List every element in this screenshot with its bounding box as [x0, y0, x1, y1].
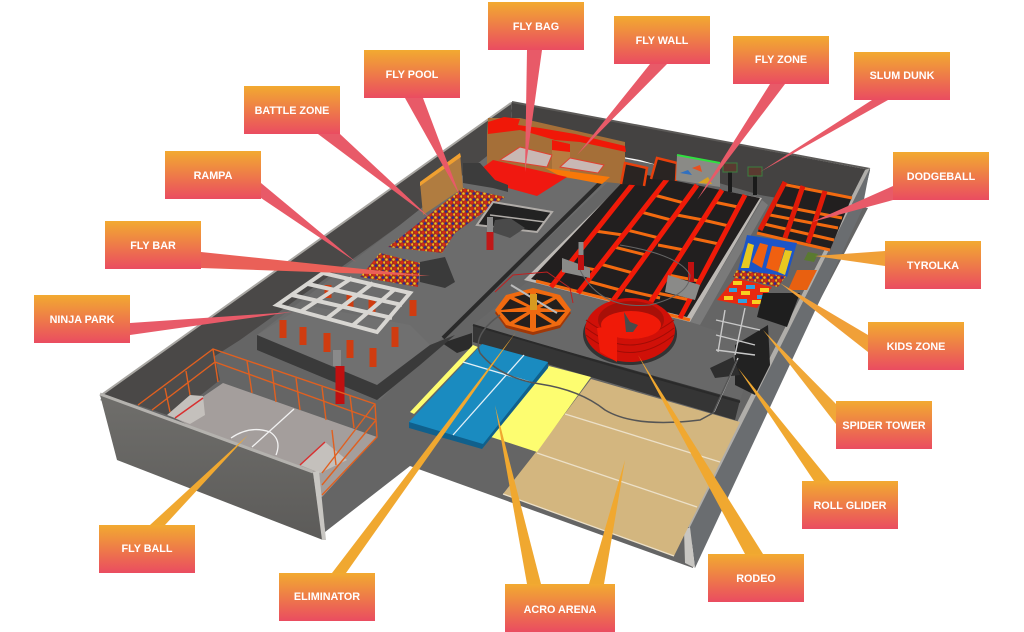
blue mat: [409, 362, 548, 449]
spider tower: [710, 308, 770, 412]
fly ball front wall: [100, 394, 326, 540]
arrow: ninja park: [130, 312, 292, 335]
label: roll glider: [802, 481, 898, 529]
column: battle zone: [486, 217, 494, 250]
upper level floor: [257, 138, 610, 400]
label: acro arena: ACRO ARENA: [524, 604, 597, 616]
label: eliminator: ELIMINATOR: [294, 591, 360, 603]
label: rodeo: RODEO: [736, 573, 776, 585]
column: fly ball: [337, 350, 340, 404]
rodeo: [583, 298, 677, 365]
label: kids zone: [868, 322, 964, 370]
label: fly bag: [488, 2, 584, 50]
goals: [167, 395, 205, 424]
label: slum dunk: SLUM DUNK: [870, 70, 935, 82]
label: slum dunk: [854, 52, 950, 100]
arrow: acro arena left: [495, 405, 541, 584]
label: rampa: [165, 151, 261, 199]
arrow: fly pool: [405, 98, 460, 196]
arrow: slum dunk: [760, 100, 888, 172]
wood back wall: [487, 118, 625, 184]
ball pit: fly pool: [388, 188, 505, 253]
arrow: rampa: [261, 183, 356, 262]
arrow: fly zone: [697, 84, 785, 200]
ninja park platform: [257, 305, 455, 400]
tyrolka pad: [788, 270, 817, 290]
label: battle zone: [244, 86, 340, 134]
building shell: [100, 102, 870, 568]
label: fly zone: FLY ZONE: [755, 54, 807, 66]
kids zone: [717, 235, 818, 327]
label: fly pool: [364, 50, 460, 98]
right wall: [690, 168, 870, 568]
label: rampa: RAMPA: [194, 170, 233, 182]
label: fly zone: [733, 36, 829, 84]
label: tyrolka: TYROLKA: [907, 260, 959, 272]
acro arena: [409, 344, 740, 556]
fly zone trampolines: [524, 172, 762, 322]
arrow: kids zone: [780, 283, 868, 352]
arrow: tyrolka: [815, 251, 885, 266]
label: fly wall: [614, 16, 710, 64]
arrow: acro arena right: [589, 460, 625, 584]
zip cable upper: [580, 245, 690, 306]
label: fly bag: FLY BAG: [513, 21, 559, 33]
tan floor: [503, 379, 740, 556]
orange mat: [545, 168, 610, 184]
back left wall: [100, 102, 512, 405]
arrow: fly ball: [150, 435, 248, 525]
arrow: eliminator: [332, 332, 516, 573]
label: fly wall: FLY WALL: [636, 35, 689, 47]
label: fly bar: [105, 221, 201, 269]
black pits: [477, 202, 552, 238]
court pads: [500, 147, 552, 167]
arrow: spider tower: [763, 330, 836, 424]
arrow: fly bar: [201, 252, 430, 276]
red mat: [482, 160, 567, 196]
ramps: [621, 158, 677, 186]
label: tyrolka: [885, 241, 981, 289]
label: rodeo: [708, 554, 804, 602]
black block: [757, 293, 800, 327]
arrow: fly wall: [577, 64, 667, 155]
label: battle zone: BATTLE ZONE: [255, 105, 329, 117]
back right wall: [510, 102, 870, 212]
fly ball court: [138, 349, 377, 497]
ball pit: fly bar: [360, 253, 420, 287]
label: fly ball: [99, 525, 195, 573]
label: dodgeball: DODGEBALL: [907, 171, 976, 183]
eliminator: [495, 272, 573, 335]
label: fly pool: FLY POOL: [386, 69, 439, 81]
divider: [443, 180, 603, 338]
dodgeball court: [757, 182, 852, 250]
climbing wall: [420, 153, 463, 215]
stairs block: [463, 163, 508, 192]
label: fly bar: FLY BAR: [130, 240, 176, 252]
fly bag area: [463, 117, 626, 196]
slum dunk boards: [723, 163, 762, 195]
kids floor tiles: [717, 278, 772, 308]
label: dodgeball: [893, 152, 989, 200]
label: eliminator: [279, 573, 375, 621]
side wall by kids zone: [690, 200, 768, 325]
label: fly ball: FLY BALL: [122, 543, 173, 555]
arrow: roll glider: [738, 368, 830, 481]
court markings: [231, 409, 294, 455]
stairs: [442, 333, 472, 353]
central platform: [473, 282, 760, 420]
columns in fly zone: [562, 242, 700, 300]
spiral stairs: [420, 257, 455, 288]
ninja park truss: [277, 273, 413, 367]
label: kids zone: KIDS ZONE: [887, 341, 945, 353]
yellow floors: [410, 345, 478, 414]
kids ball pit: [733, 270, 786, 287]
orange crossbars: [536, 195, 738, 320]
orange railing: [138, 349, 377, 495]
arrow: fly bag: [525, 50, 542, 172]
label: ninja park: NINJA PARK: [50, 314, 115, 326]
label: ninja park: [34, 295, 130, 343]
roll glider cable: [478, 315, 737, 422]
arrow: battle zone: [318, 134, 430, 218]
label: spider tower: [836, 401, 932, 449]
arrow: rodeo: [638, 355, 763, 554]
label: roll glider: ROLL GLIDER: [814, 500, 887, 512]
red long bars: [551, 175, 745, 318]
label: spider tower: SPIDER TOWER: [842, 420, 926, 432]
fly wall panel: [676, 155, 720, 187]
label: acro arena: [505, 584, 615, 632]
arrow: dodgeball: [812, 186, 893, 222]
